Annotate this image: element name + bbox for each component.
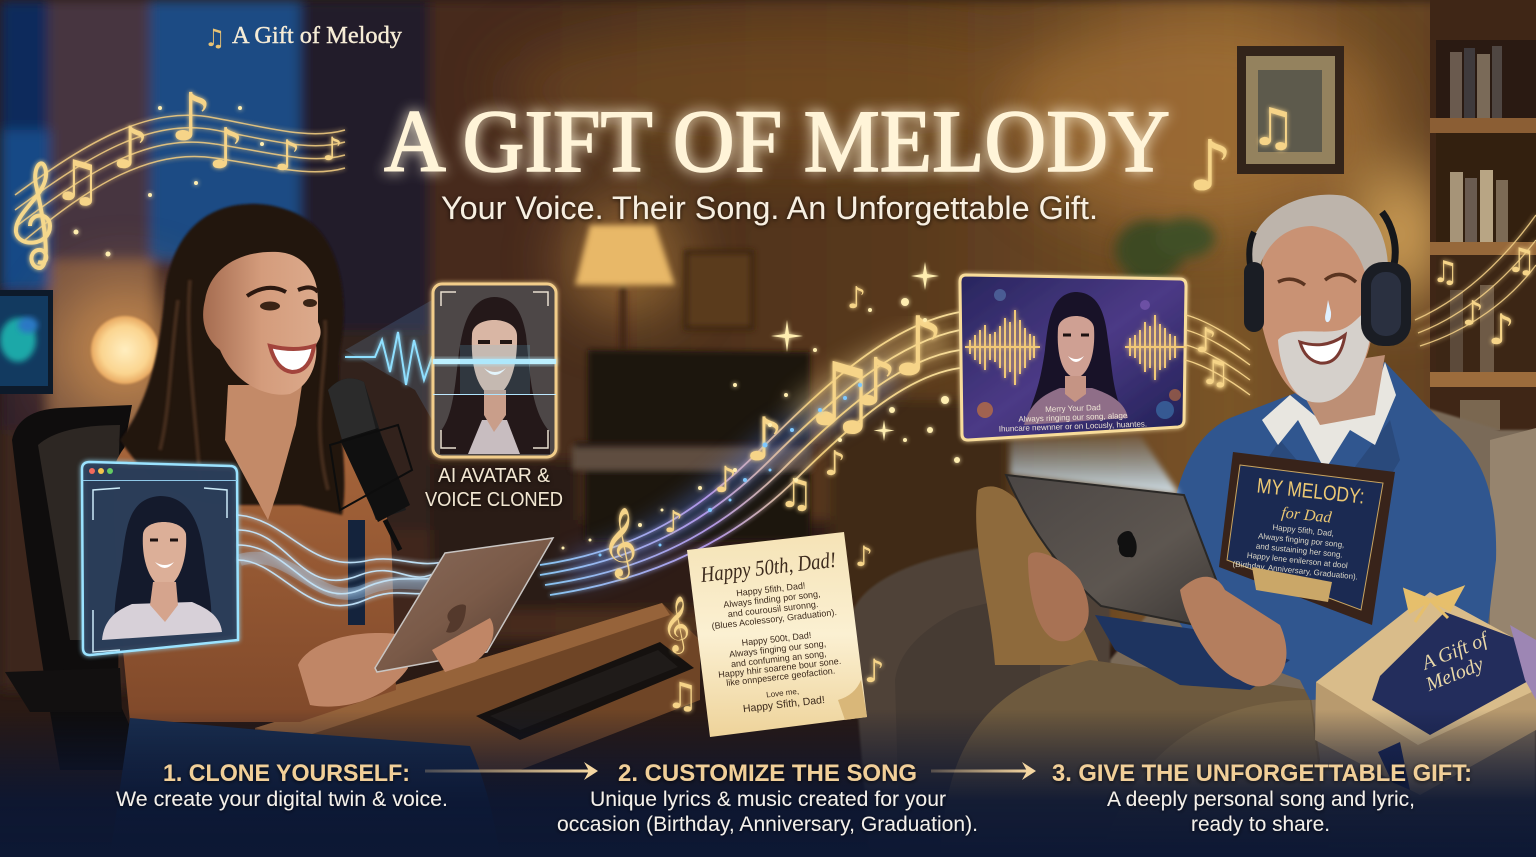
sheet body lines: Happy 500t, Dad! [741,630,812,648]
card: singer body [1024,388,1128,425]
plaque text lines: Always finging por song, [1258,532,1345,550]
sheet body lines: Happy 5fith, Dad! [736,580,806,598]
melody ribbon: notes and sparkles from tablet to video card: ♪ [824,444,846,484]
lyric sheet: Happy 50th, Dad [687,532,867,737]
card: lyric captions: Ihuncare newnner or on Locusly, huantes. [999,419,1147,434]
plaque subtitle: for Dad [1281,504,1333,527]
neck [1290,355,1385,425]
bookshelf [1430,0,1536,440]
gold notes on right edge [1188,98,1536,354]
left hand [1028,552,1089,641]
gold music staff top-left with treble clef [15,79,345,268]
keyboard [476,642,694,740]
plaque title: MY MELODY: [1256,474,1366,509]
right hand [1180,577,1286,686]
subtitle: Your Voice. Their Song. An Unforgettable Gift. [441,190,1098,226]
desk [255,603,700,770]
avatar: hair and shoulders [440,297,550,454]
avatar card: AI avatar and voice cloned [433,284,556,457]
card: lyric captions: Always ringing our song, alage [1018,411,1128,424]
woman: neck and chest [225,385,302,520]
woman: smile [270,346,314,372]
hair [1249,195,1388,290]
sofa [850,400,1536,857]
sheet body lines: Always finding por song, [723,589,821,610]
avatar: corner brackets [441,292,548,448]
man's tablet [1006,475,1286,686]
card: lyric captions: Merry Your Dad [1045,403,1101,414]
sheet heading: Happy 50th, Dad! [698,547,837,587]
shirt collar [1262,362,1396,470]
gold notes on right edge: ♪ [1188,125,1233,207]
woman: hands [298,633,408,707]
brown cushion [976,486,1100,665]
plaque text lines [1232,523,1358,582]
gold notes on right edge: ♫ [1250,98,1297,158]
man's head and headphones [1244,195,1411,425]
beard [1278,310,1372,403]
sheet body lines: and confuming an song, [730,648,827,669]
eyes [1278,274,1356,285]
avatar: scan line [433,359,556,364]
gift box label: Melody [1422,653,1487,696]
melody ribbon: notes and sparkles from tablet to video card: ♪ [864,652,884,690]
gift box bow [1405,588,1462,622]
ribbon: coloured glow [570,370,890,570]
sheet body lines: Love me, [766,687,799,699]
avatar caption: AI AVATAR & [438,465,551,487]
avatar: top [468,420,520,454]
woman [110,204,500,857]
card: lyric captions [999,403,1147,434]
melody ribbon: notes and sparkles from tablet to video card: ♪ [855,344,897,421]
monitor [0,290,53,394]
logo: A Gift of Melody: A Gift of Melody [232,23,402,49]
microphone on stand [328,378,412,625]
step 1: clone yourself: 1. CLONE YOURSELF: [163,760,410,787]
logo note icon: ♫ [204,24,226,52]
data wave lines from window to tablet [238,515,450,606]
woman: jeans [110,718,500,857]
ribbon: notes: 𝄞 [602,507,637,579]
sheet body lines [708,577,847,718]
window: corner brackets [93,488,227,652]
gold notes on right edge: ♪ [1488,305,1515,354]
plaque text lines: (Birthday, Anniversary, Graduation). [1232,559,1358,582]
plant [1115,218,1215,304]
notes flowing from card to man [1185,315,1250,395]
title: A GIFT OF MELODY [384,93,1170,191]
woman: hair highlights [160,280,328,490]
gold notes on right edge: ♫ [1432,255,1459,290]
step 1: clone yourself: We create your digital twin & voice. [116,788,448,811]
step 3: give the unforgettable gift: ready to share. [1191,813,1330,836]
face [1258,218,1372,400]
blue scan wave connecting woman to avatar [345,300,556,420]
melody ribbon: notes and sparkles from tablet to video card: ♪ [714,460,737,501]
window: traffic light dots [89,468,95,474]
treble clef [16,163,50,268]
avatar caption [425,465,563,511]
tablet logo [1117,531,1137,557]
warm wall glows [55,10,1445,420]
bottom dark band [0,710,1536,857]
sheet body lines: Happy hhir soarene bour sone. [718,656,842,680]
card: bokeh [977,402,993,418]
step 3: give the unforgettable gift: 3. GIVE THE UNFORGETTABLE GIFT: [1052,760,1472,787]
gift box label: A Gift of [1417,627,1493,675]
woman: face [203,252,321,395]
sheet body lines: Always finging our song, [729,638,827,659]
framed picture [1237,46,1344,174]
plaque text lines: Happy 5fith, Dad, [1272,523,1334,538]
melody ribbon: notes and sparkles from tablet to video card: ♪ [847,281,866,316]
globe lamp [91,316,159,384]
avatar: face [472,320,517,396]
melody plaque: My Melody for Dad [1219,452,1395,625]
sheet body lines: (Blues Acolessory, Graduation). [711,607,837,631]
gold notes on right edge: ♪ [1462,294,1484,334]
gold music staff top-left with treble clef: ♪ [322,130,342,168]
melody ribbon: notes and sparkles from tablet to video card: ♫ [666,676,698,717]
arrow: step 2 to step 3 [931,762,1036,780]
gold music staff top-left with treble clef: ♪ [170,79,212,156]
video card on hologram: song playing [960,275,1186,440]
arrow: step 1 to step 2 [425,762,598,780]
woman: sweater torso [114,418,396,722]
office chair [5,405,150,770]
sheet body lines: Happy Sfith, Dad! [742,694,825,715]
step 2: customize the song: 2. CUSTOMIZE THE SONG [618,760,917,787]
woman: eyes, brows [247,287,318,296]
melody ribbon: notes and sparkles from tablet to video card: ♫ [778,471,814,517]
gift box label [1417,627,1493,696]
window: avatar face [143,522,186,588]
melody ribbon: notes and sparkles from tablet to video card: ♪ [892,300,944,395]
man's sweater and body [1095,362,1496,700]
sheet body lines: like onnpeserce geofaction. [726,666,836,688]
melody ribbon: notes and sparkles from tablet to video card: ♪ [745,405,783,475]
plaque text lines: and sustaining her song. [1255,541,1343,560]
holographic beam from man's tablet [1010,435,1180,495]
step 2: customize the song [557,760,978,836]
melody ribbon: notes and sparkles from tablet to video card: ♪ [664,505,683,540]
gift box ribbon [1378,742,1410,790]
window: avatar hair [115,496,211,636]
plaque brass label [1252,567,1332,602]
woman: hair [120,204,344,515]
gold music staff top-left with treble clef: ♫ [52,149,102,214]
ribbon: sparkles [562,262,960,550]
card: singer face [1058,316,1094,378]
melody ribbon: notes and sparkles from tablet to video card: ♫ [800,343,879,446]
thumb [432,618,494,672]
window: avatar top [102,602,222,640]
tablet logo [446,604,466,633]
step 1: clone yourself [116,760,448,811]
melody ribbon: notes and sparkles from tablet to video card: ♪ [855,540,873,573]
gold notes on right edge: ♫ [1506,241,1536,281]
tear [1325,300,1331,322]
step 3: give the unforgettable gift: A deeply personal song and lyric, [1107,788,1415,811]
card: waveform [965,310,1186,385]
sleeve [1095,615,1290,690]
step 2: customize the song: Unique lyrics & music created for your [590,788,946,811]
sheet body lines: and courousil suronng. [727,599,819,619]
melody ribbon: notes and sparkles from tablet to video card [540,262,960,717]
gold music staff top-left with treble clef: ♪ [112,114,149,182]
notes flowing from card to man: ♫ [1200,353,1230,393]
melody ribbon: notes and sparkles from tablet to video card: 𝄞 [662,596,690,654]
avatar caption: VOICE CLONED [425,489,563,511]
man's legs [940,660,1330,857]
mouth [1300,335,1345,363]
floor lamp and shade [575,225,752,350]
step 2: customize the song: occasion (Birthday, Anniversary, Graduation). [557,813,978,836]
plaque text lines: Happy lene enilerson at dool [1246,551,1348,570]
card: singer hair [1030,292,1120,410]
holographic window: digital twin [82,462,238,655]
piano [572,350,812,540]
gift box [1315,588,1536,795]
gold music staff top-left with treble clef: ♪ [274,131,301,180]
woman's tablet [375,538,553,672]
step 3: give the unforgettable gift [1052,760,1472,836]
notes flowing from card to man: ♪ [1195,321,1217,361]
gold music staff top-left with treble clef: ♪ [208,117,244,182]
headphones [1382,212,1395,265]
